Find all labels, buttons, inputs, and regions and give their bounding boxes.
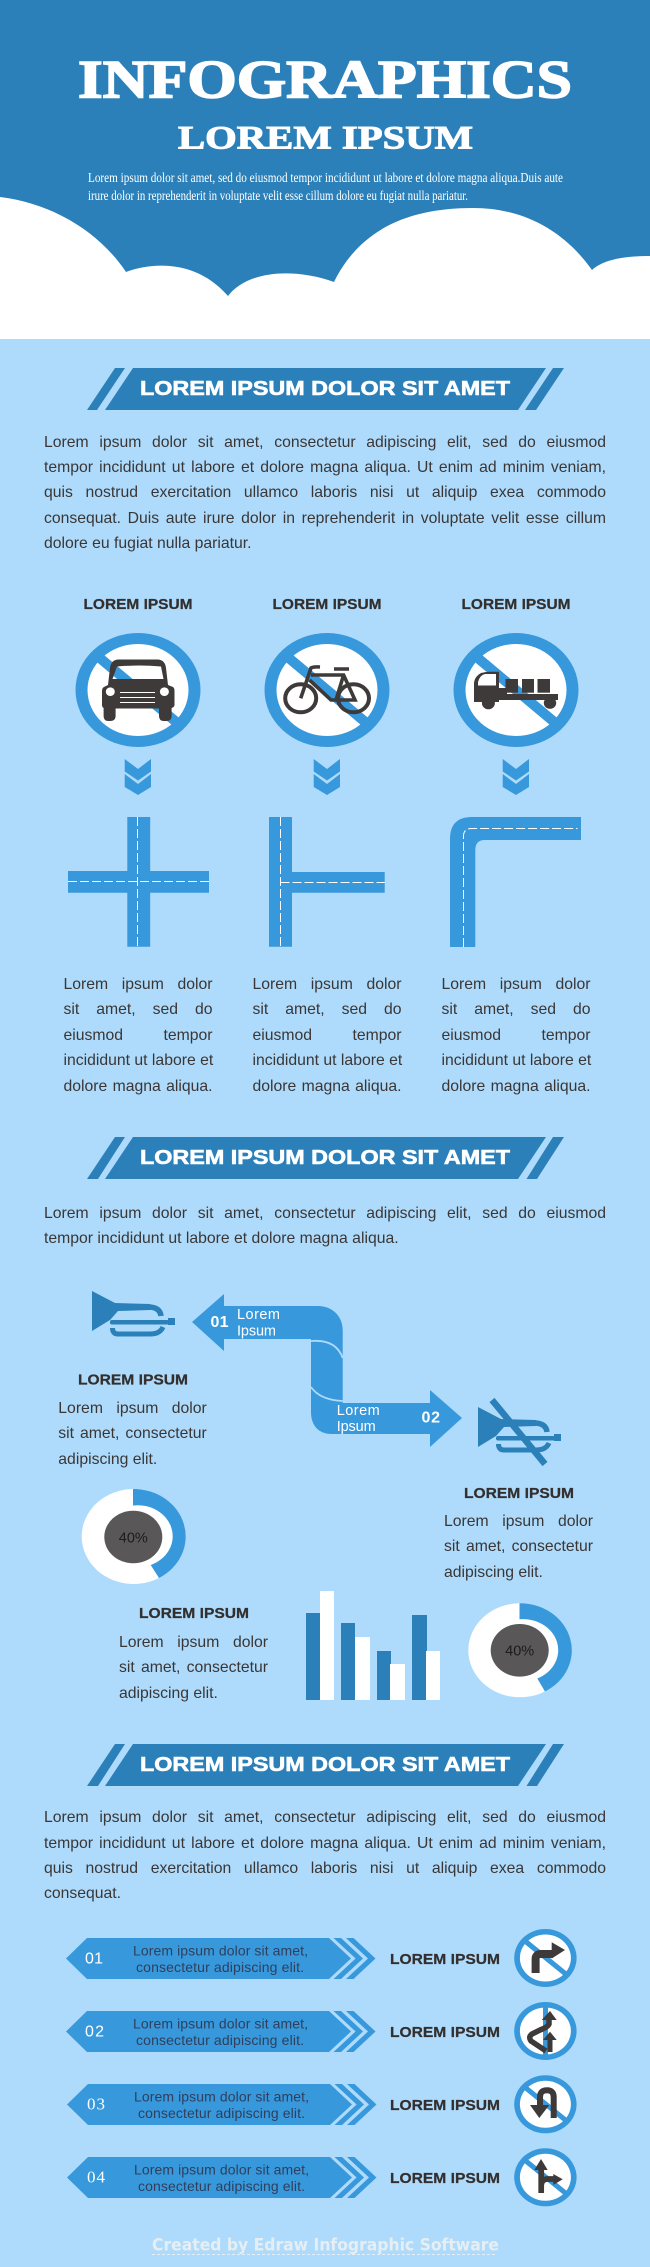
icon: no cars	[76, 633, 200, 747]
list row 3: consectetur adipiscing elit.	[138, 2105, 305, 2121]
list row 4	[67, 2148, 577, 2206]
panel: section three, list of restrictions	[44, 1744, 606, 2256]
list row 2	[66, 2002, 577, 2060]
heading: bar chart: LOREM IPSUM	[139, 1606, 249, 1622]
cloud shape	[0, 197, 650, 339]
column text 3: eiusmod tempor	[442, 1027, 590, 1044]
column text 1: incididunt ut labore et	[64, 1052, 213, 1069]
section three text	[44, 1809, 606, 1902]
section heading banner	[87, 1137, 564, 1179]
label Lorem Ipsum 1: Ipsum	[237, 1324, 276, 1340]
list row 2: Lorem ipsum dolor sit amet,	[133, 2016, 308, 2032]
column text 1: sit amet, sed do	[64, 1001, 212, 1018]
section one text: quis nostrud exercitation ullamco laboris nisi ut aliquip exea commodo	[44, 484, 606, 501]
bar chart text: sit amet, consectetur	[119, 1659, 268, 1676]
donut chart left: 40%	[119, 1531, 148, 1547]
arrows: chevrons 2	[314, 759, 340, 795]
list row 1: LOREM IPSUM	[390, 1951, 500, 1968]
road: crossroads	[68, 817, 209, 947]
bar chart text: adipiscing elit.	[119, 1685, 218, 1702]
column text 2	[252, 976, 402, 1095]
panel: section one, vehicles and roads	[44, 368, 606, 1095]
list row 1: Lorem ipsum dolor sit amet,	[133, 1943, 308, 1959]
label Lorem Ipsum 2: Lorem	[337, 1403, 380, 1419]
section two text	[44, 1205, 606, 1247]
list row 3: Lorem ipsum dolor sit amet,	[134, 2089, 309, 2105]
icon: no U-turn	[514, 2075, 577, 2133]
title: INFOGRAPHICS	[78, 50, 572, 110]
bar chart text: Lorem ipsum dolor	[119, 1634, 268, 1651]
section heading banner: LOREM IPSUM DOLOR SIT AMET	[140, 378, 510, 400]
ribbon arrow	[192, 1294, 462, 1447]
column text 2: dolore magna aliqua.	[252, 1078, 402, 1095]
section one text: Lorem ipsum dolor sit amet, consectetur adipiscing elit, sed do eiusmod	[44, 434, 606, 451]
column text 2: Lorem ipsum dolor	[252, 976, 402, 993]
hero panel	[0, 0, 650, 339]
column heading 1: LOREM IPSUM	[84, 597, 192, 613]
label Lorem Ipsum 2: Ipsum	[337, 1419, 376, 1435]
section heading banner: LOREM IPSUM DOLOR SIT AMET	[140, 1754, 510, 1776]
arrows: chevrons 1	[125, 759, 151, 795]
section three text: quis nostrud exercitation ullamco laboris nisi ut aliquip exea commodo	[44, 1860, 606, 1877]
section one text: tempor incididunt ut labore et dolore magna aliqua. Ut enim ad minim veniam,	[44, 459, 606, 476]
column text 1	[64, 976, 214, 1095]
donut chart right	[468, 1603, 572, 1697]
column heading 3: LOREM IPSUM	[462, 597, 570, 613]
list row 2: LOREM IPSUM	[390, 2024, 500, 2041]
donut chart right: 40%	[505, 1644, 534, 1660]
arrows: chevrons 3	[503, 759, 529, 795]
horn text	[58, 1400, 207, 1468]
list row 1: 01	[85, 1950, 103, 1968]
label Lorem Ipsum 1: Lorem	[237, 1307, 280, 1323]
column text 2: eiusmod tempor	[252, 1027, 402, 1044]
label Lorem Ipsum 1	[237, 1307, 280, 1340]
subtitle: LOREM IPSUM	[178, 120, 473, 156]
list row 4: LOREM IPSUM	[390, 2170, 500, 2187]
list row 2: consectetur adipiscing elit.	[136, 2032, 304, 2048]
list row 3	[67, 2075, 577, 2133]
section three text: tempor incididunt ut labore et dolore magna aliqua. Ut enim ad minim veniam,	[44, 1835, 606, 1852]
column text 2: sit amet, sed do	[252, 1001, 402, 1018]
column text 3: Lorem ipsum dolor	[442, 976, 590, 993]
column heading 2: LOREM IPSUM	[272, 597, 382, 613]
bar chart	[306, 1591, 440, 1700]
list row 3: LOREM IPSUM	[390, 2097, 500, 2114]
heading: horn: LOREM IPSUM	[78, 1372, 188, 1388]
section one text	[44, 434, 606, 552]
heading: horn prohibited: LOREM IPSUM	[464, 1486, 574, 1502]
column text 3: sit amet, sed do	[442, 1001, 590, 1018]
column text 1: eiusmod tempor	[64, 1027, 212, 1044]
road: corner	[450, 817, 581, 947]
intro text: irure dolor in reprehenderit in voluptate velit esse cillum dolore eu fugiat nulla pariatur.	[88, 189, 468, 204]
list row 1	[66, 1929, 577, 1987]
section three text: consequat.	[44, 1885, 121, 1902]
column text 1: dolore magna aliqua.	[64, 1078, 212, 1095]
list row 4: consectetur adipiscing elit.	[138, 2178, 305, 2194]
horn prohibited text: adipiscing elit.	[444, 1564, 543, 1581]
label 01: 01	[210, 1314, 229, 1331]
list row 4: Lorem ipsum dolor sit amet,	[134, 2162, 309, 2178]
intro text	[88, 171, 563, 204]
column text 3: dolore magna aliqua.	[442, 1078, 590, 1095]
horn text: Lorem ipsum dolor	[58, 1400, 207, 1417]
list row 4: 04	[87, 2168, 106, 2186]
icon: horn prohibited	[478, 1400, 561, 1464]
label 02: 02	[422, 1410, 440, 1427]
section three text: Lorem ipsum dolor sit amet, consectetur adipiscing elit, sed do eiusmod	[44, 1809, 606, 1826]
list row 3: 03	[87, 2094, 105, 2114]
list row 2: 02	[85, 2024, 104, 2040]
section two text: tempor incididunt ut labore et dolore magna aliqua.	[44, 1230, 399, 1247]
column text 3: incididunt ut labore et	[442, 1052, 591, 1069]
column text 3	[442, 976, 592, 1095]
section heading banner	[87, 368, 564, 410]
column text 2: incididunt ut labore et	[252, 1052, 402, 1069]
icon: no bicycles	[264, 633, 390, 747]
horn prohibited text: Lorem ipsum dolor	[444, 1513, 593, 1530]
icon: horn	[92, 1291, 175, 1334]
icon: no trucks	[454, 633, 578, 747]
section one text: consequat. Duis aute irure dolor in reprehenderit in voluptate velit esse cillum	[44, 510, 606, 527]
label Lorem Ipsum 2	[337, 1403, 380, 1435]
section heading banner	[87, 1744, 564, 1786]
donut chart left	[82, 1489, 186, 1584]
horn prohibited text: sit amet, consectetur	[444, 1538, 593, 1555]
icon: no overtaking curve	[514, 2002, 577, 2060]
horn text: sit amet, consectetur	[58, 1425, 207, 1442]
section one text: dolore eu fugiat nulla pariatur.	[44, 535, 252, 552]
section two text: Lorem ipsum dolor sit amet, consectetur adipiscing elit, sed do eiusmod	[44, 1205, 606, 1222]
column text 1: Lorem ipsum dolor	[64, 976, 212, 993]
horn prohibited text	[444, 1513, 593, 1581]
icon: no straight or right	[514, 2148, 577, 2206]
panel: section two, horn and charts	[44, 1137, 606, 1702]
bar chart text	[119, 1634, 268, 1702]
list row 1: consectetur adipiscing elit.	[136, 1959, 304, 1975]
section heading banner: LOREM IPSUM DOLOR SIT AMET	[140, 1147, 510, 1169]
footer credit: Created by Edraw Infographic Software	[152, 2236, 499, 2256]
horn text: adipiscing elit.	[58, 1451, 157, 1468]
icon: no right turn	[514, 1929, 577, 1987]
road: T junction	[269, 817, 385, 947]
